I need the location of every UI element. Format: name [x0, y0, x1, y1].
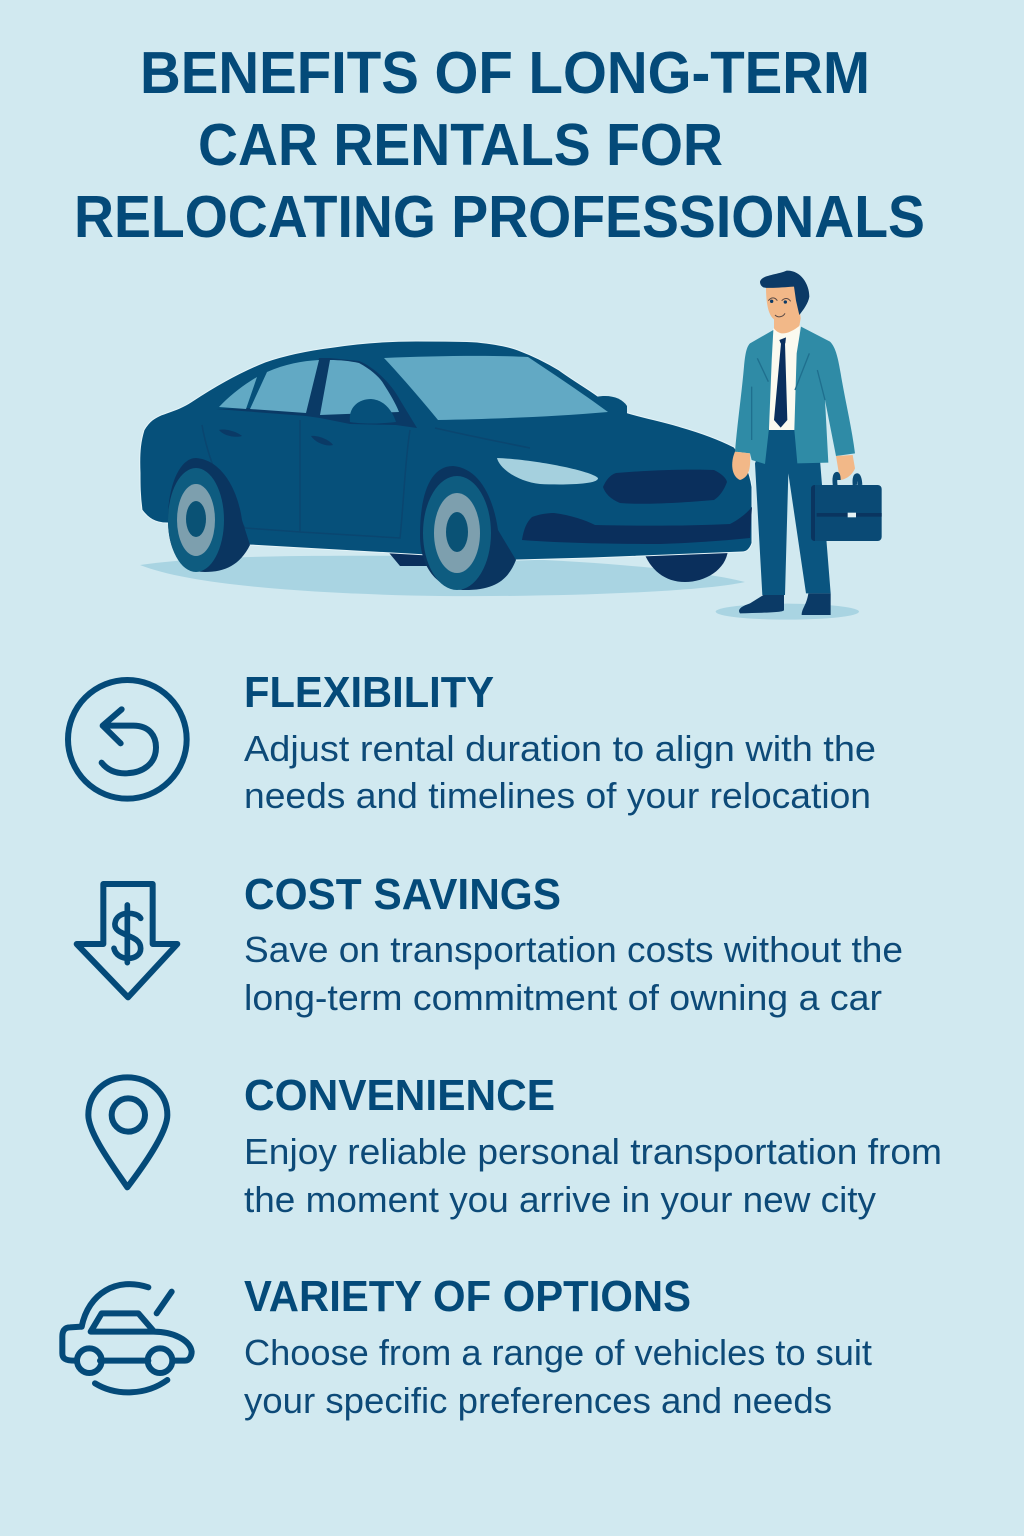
benefit: cost savings: long-term commitment of owning a car [244, 977, 882, 1018]
car grille [603, 470, 727, 504]
benefit: flexibility: FLEXIBILITY [244, 668, 494, 717]
benefit: convenience [88, 1071, 942, 1220]
title: CAR RENTALS FOR [198, 112, 723, 178]
benefit: variety of options: your specific preferences and needs [244, 1380, 832, 1421]
benefit: cost savings: Save on transportation costs without the [244, 929, 903, 970]
benefit: variety of options: Choose from a range of vehicles to suit [244, 1332, 872, 1373]
title: RELOCATING PROFESSIONALS [74, 184, 925, 250]
icon: car with arcs [62, 1284, 192, 1392]
benefit: flexibility: needs and timelines of your relocation [244, 775, 871, 816]
benefit: variety of options [62, 1272, 872, 1421]
benefit: flexibility [68, 668, 876, 816]
icon: circular return arrow [68, 680, 187, 799]
icon: location pin [88, 1077, 167, 1187]
car window surround [216, 358, 417, 428]
title: BENEFITS OF LONG-TERM [140, 40, 870, 106]
car door lines and handles [202, 420, 410, 538]
car headlight [497, 458, 598, 484]
benefit: flexibility: Adjust rental duration to align with the [244, 728, 876, 769]
car lower intake [522, 507, 752, 544]
car mirror [350, 399, 396, 424]
benefit: convenience: CONVENIENCE [244, 1071, 555, 1120]
benefit: convenience: the moment you arrive in your new city [244, 1179, 876, 1220]
icon: down arrow with dollar sign [77, 884, 177, 997]
benefit: cost savings: COST SAVINGS [244, 870, 561, 919]
benefit: variety of options: VARIETY OF OPTIONS [244, 1272, 691, 1321]
benefit: cost savings [77, 870, 903, 1018]
benefit: convenience: Enjoy reliable personal transportation from [244, 1131, 942, 1172]
illustration: businessman with briefcase [716, 271, 882, 620]
car rear wheel [168, 458, 250, 572]
car front wheel [420, 466, 516, 590]
illustration: car [140, 341, 752, 596]
title [74, 40, 925, 250]
